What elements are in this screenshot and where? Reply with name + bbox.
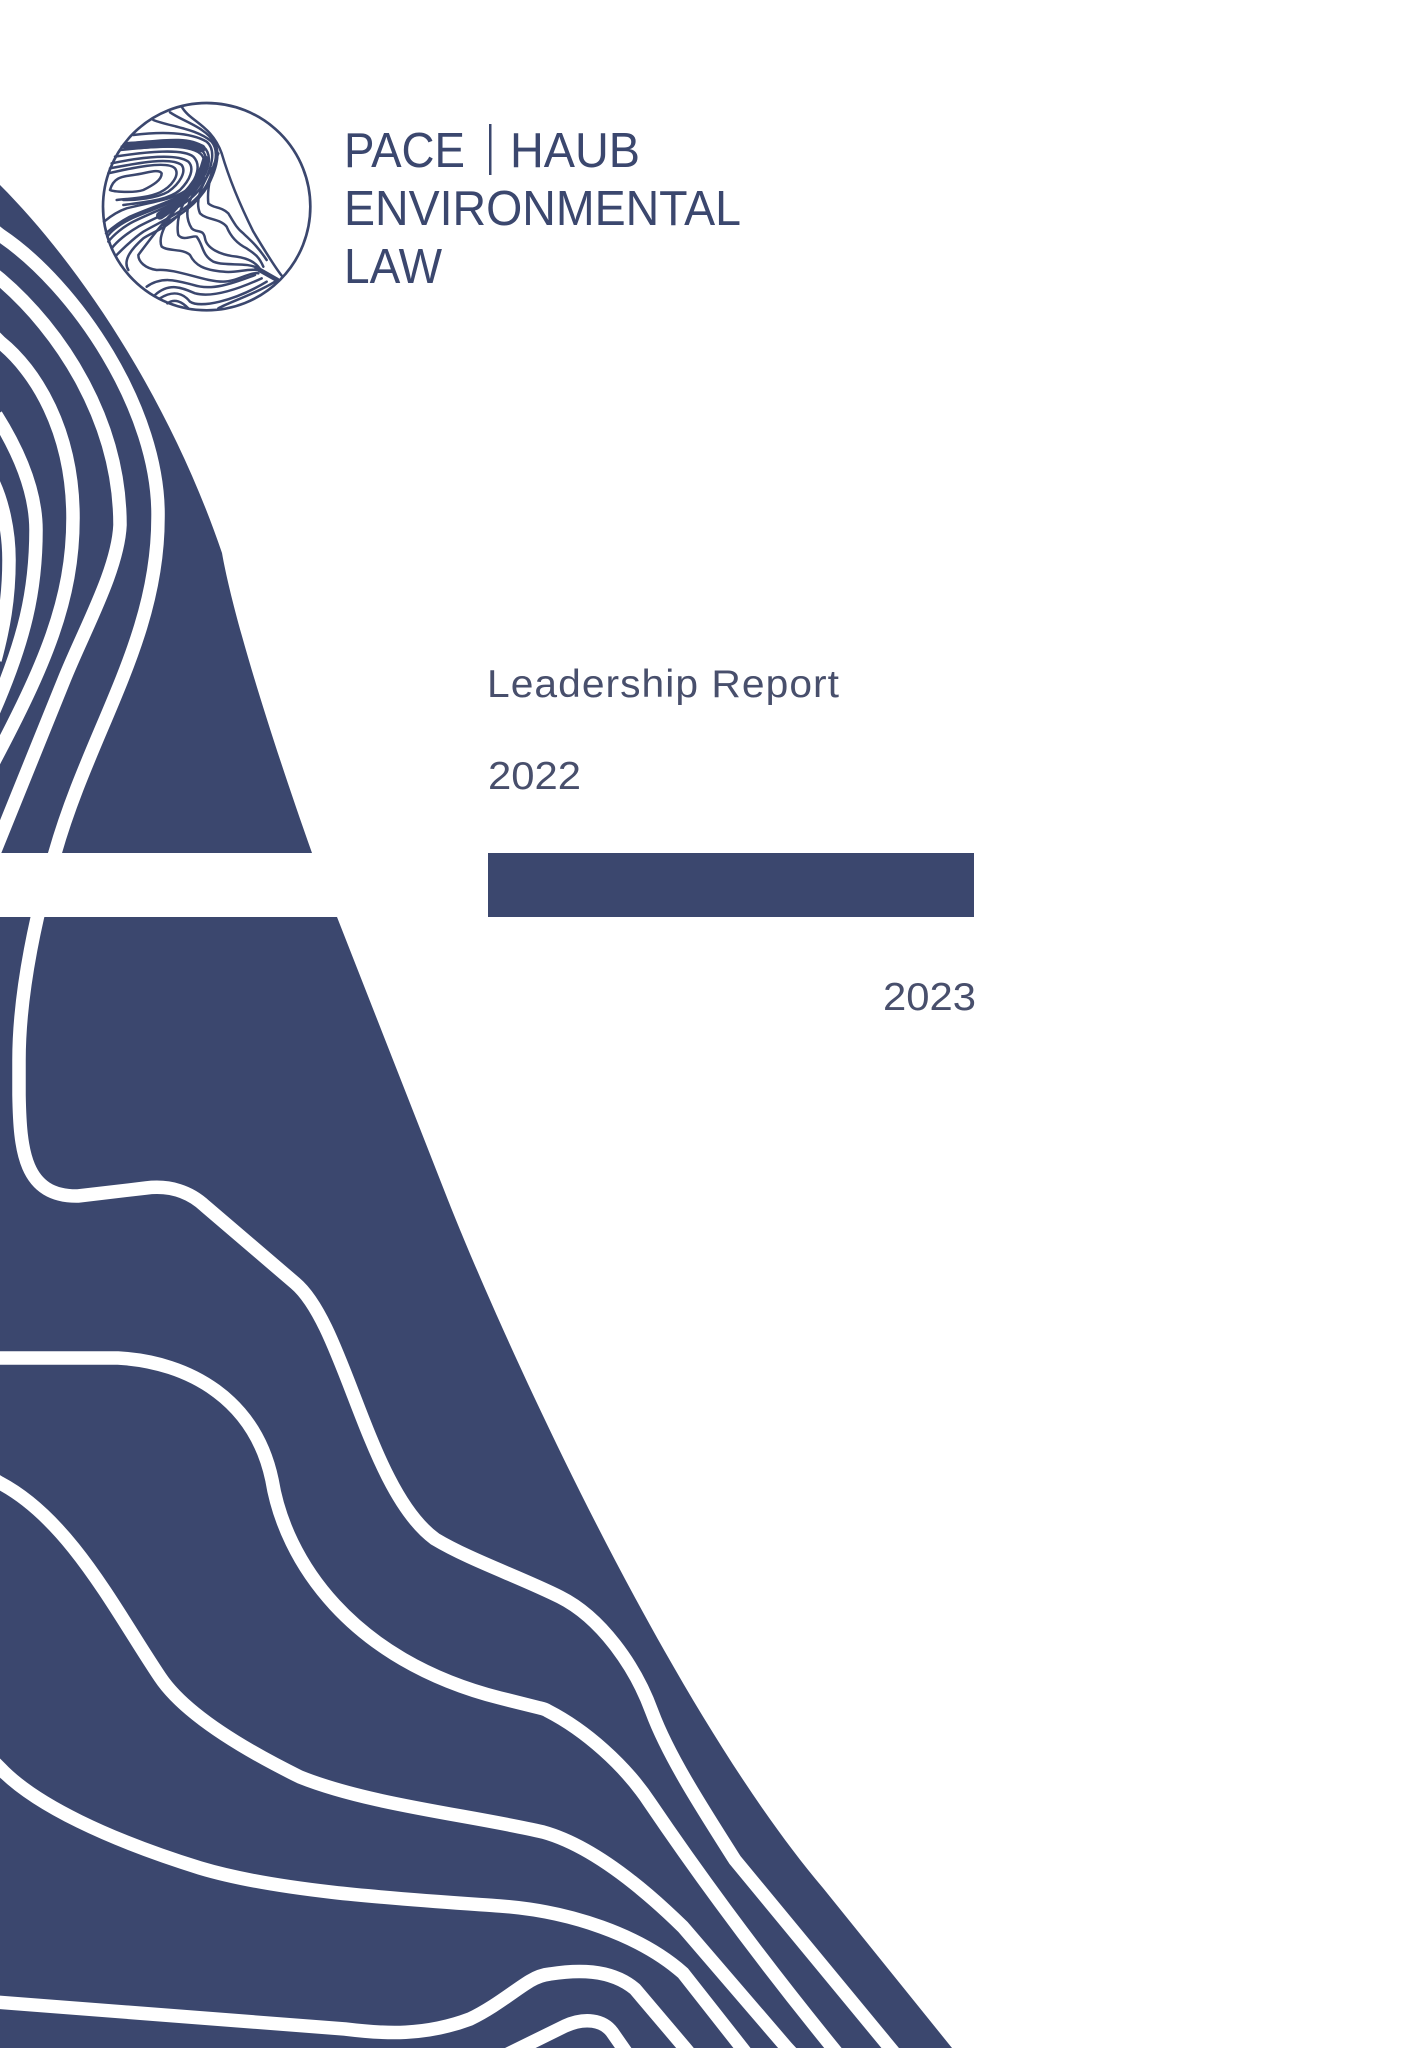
- emblem contour lines: [104, 107, 282, 308]
- report title: Leadership Report: [487, 663, 840, 706]
- start year 2022: 2022: [488, 755, 581, 798]
- contour line D: [0, 415, 36, 715]
- emblem ring: [103, 103, 310, 310]
- wordmark: PACE: PACE: [344, 123, 465, 178]
- contour line H: [0, 1763, 765, 2048]
- end year 2023: 2023: [883, 976, 976, 1019]
- contour line A: [0, 231, 910, 2048]
- wordmark: divider bar: [489, 124, 492, 175]
- contour line E: [0, 480, 9, 660]
- topographic shape: upper piece: [0, 185, 312, 853]
- topographic shape: lower piece: [0, 917, 952, 2048]
- contour line B: [0, 275, 120, 858]
- contour line F: [0, 1358, 855, 2048]
- wordmark: ENVIRONMENTAL: ENVIRONMENTAL: [344, 181, 741, 236]
- dense ridge band: [127, 144, 202, 148]
- wordmark: HAUB: HAUB: [510, 123, 640, 178]
- contour line G: [0, 1480, 815, 2048]
- contour line C: [0, 337, 73, 765]
- logo wordmark: [344, 123, 741, 294]
- white contour lines: [0, 231, 910, 2048]
- contour line J: [500, 2021, 635, 2048]
- wordmark: LAW: LAW: [344, 239, 442, 294]
- timeline bar: [488, 853, 974, 917]
- logo emblem: contour circle: [103, 103, 310, 310]
- contour line I: [0, 1971, 705, 2048]
